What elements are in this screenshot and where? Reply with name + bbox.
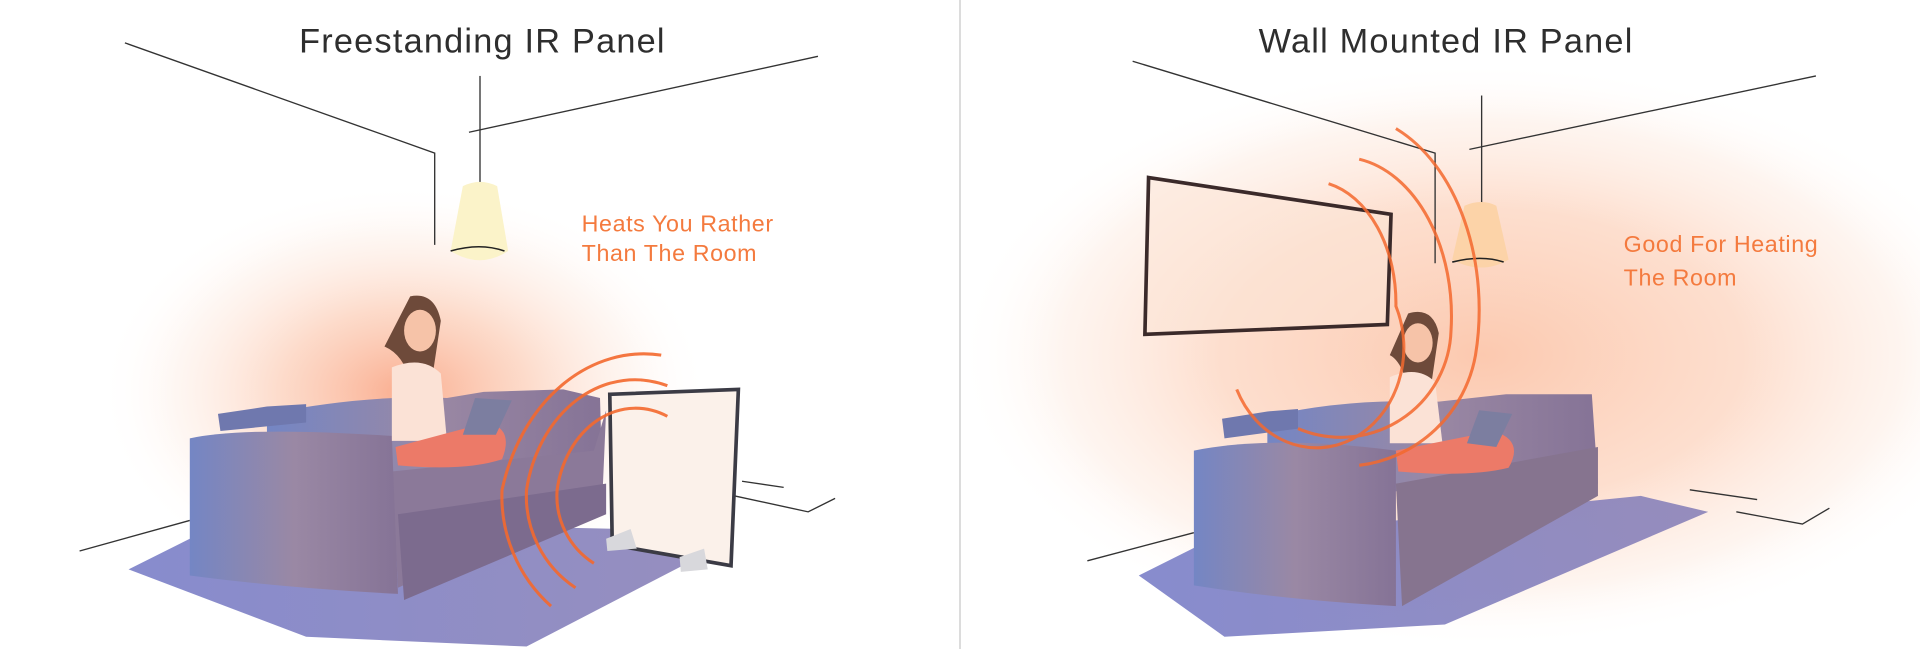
room lines left <box>80 43 835 551</box>
heat arcs right <box>1237 129 1479 465</box>
callout right: Good For Heating <box>1624 231 1818 257</box>
sofa left <box>190 389 606 600</box>
woman left <box>384 296 512 467</box>
freestanding IR panel <box>606 389 738 572</box>
sofa right <box>1194 394 1598 606</box>
title right: Wall Mounted IR Panel <box>1259 23 1634 61</box>
callout right: The Room <box>1624 264 1737 290</box>
icon: lamp right <box>1452 96 1509 268</box>
heat glow left <box>159 225 648 484</box>
room lines right <box>1087 61 1829 561</box>
wall IR panel <box>1145 178 1391 334</box>
heat arcs left <box>502 354 667 606</box>
rug right <box>1139 496 1708 637</box>
title left: Freestanding IR Panel <box>299 23 666 61</box>
callout left: Heats You Rather <box>582 210 774 236</box>
divider <box>959 0 961 649</box>
panel: wall mounted <box>1032 28 1920 637</box>
panel: freestanding <box>80 23 835 647</box>
heat glow right <box>1032 104 1920 606</box>
woman right <box>1390 312 1514 474</box>
rug left <box>129 520 692 647</box>
icon: lamp left <box>451 76 508 260</box>
callout left: Than The Room <box>582 240 757 266</box>
